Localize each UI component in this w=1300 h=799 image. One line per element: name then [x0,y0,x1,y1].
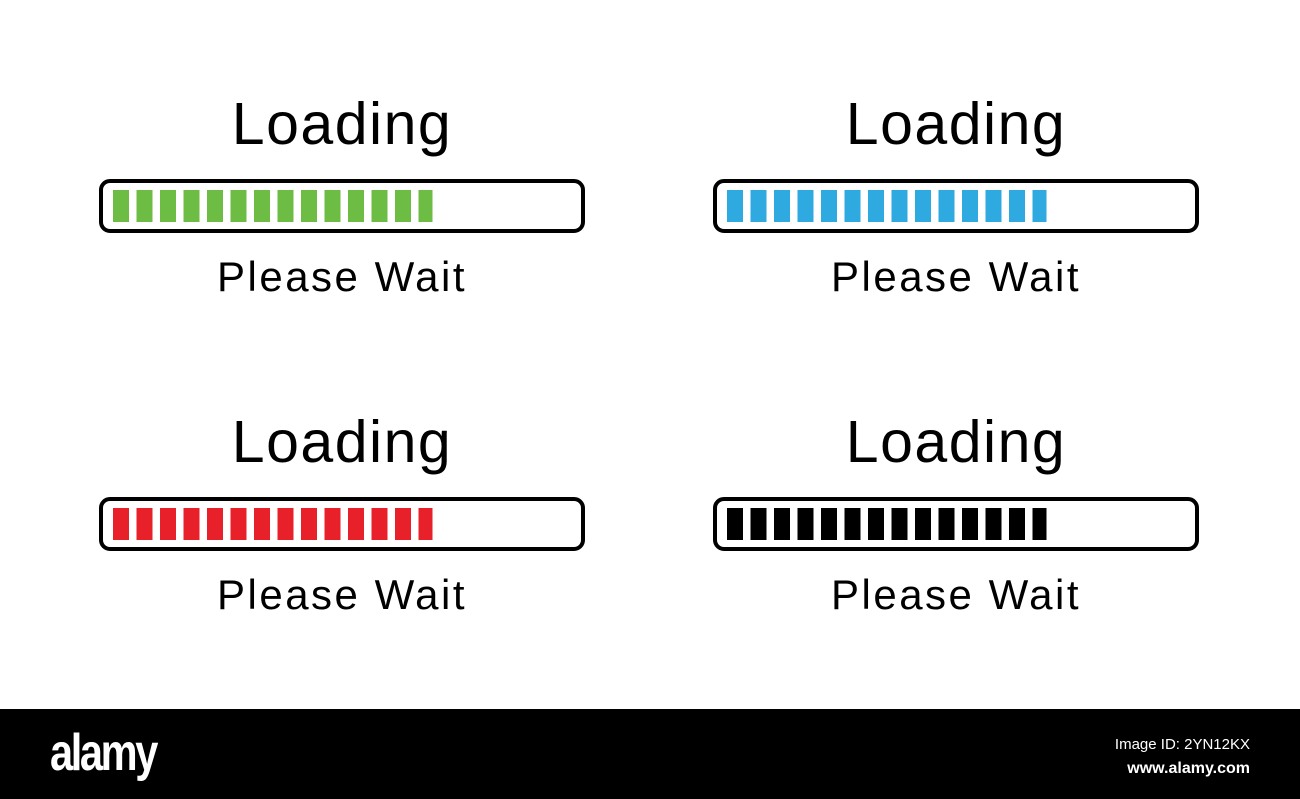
heading: Loading [232,91,452,157]
progress bar blue [713,179,1199,233]
panel: blue loader [713,91,1199,300]
progress bar black [713,497,1199,551]
logo: alamy [50,724,156,782]
image id [1115,736,1250,777]
heading: Loading [846,409,1066,475]
image id: Image ID: 2YN12KX [1115,736,1250,753]
footer bar [0,709,1300,799]
subtext: Please Wait [217,571,467,618]
subtext: Please Wait [217,253,467,300]
heading: Loading [846,91,1066,157]
image id: www.alamy.com [1127,760,1250,777]
subtext: Please Wait [831,253,1081,300]
panel: black loader [713,409,1199,618]
heading: Loading [232,409,452,475]
panel: green loader [99,91,585,300]
progress bar red [99,497,585,551]
progress bar green [99,179,585,233]
panel: red loader [99,409,585,618]
subtext: Please Wait [831,571,1081,618]
